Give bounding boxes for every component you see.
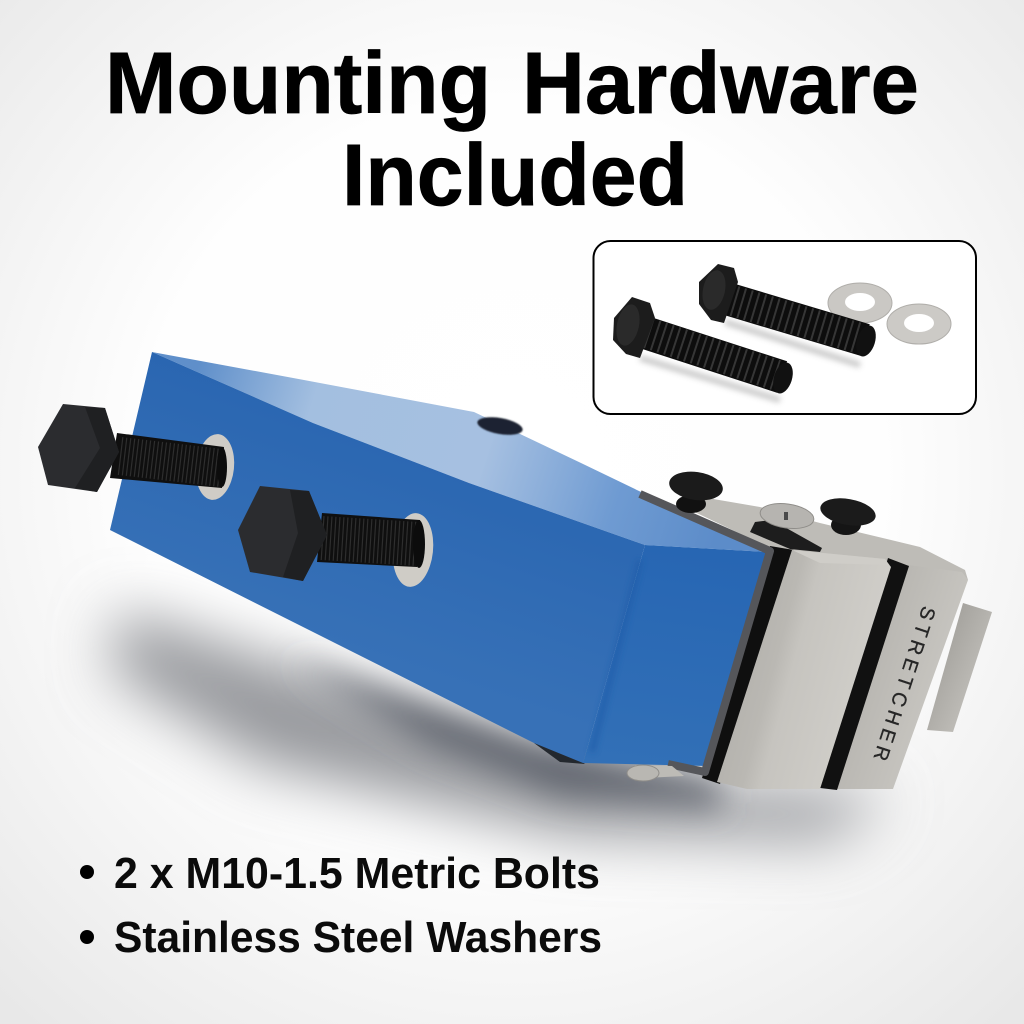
silver screw head	[759, 500, 815, 532]
housing top face	[152, 352, 768, 552]
housing front face	[110, 352, 645, 763]
stretcher bracket: rear steel section	[837, 565, 968, 789]
title	[105, 35, 919, 224]
inset bolt shadows	[640, 322, 860, 400]
black clip block	[750, 520, 822, 552]
black screw left	[667, 468, 725, 513]
inset panel: bolts and washers	[594, 241, 976, 414]
hex head	[38, 404, 119, 492]
bullet list	[80, 849, 602, 962]
title: Mounting	[105, 35, 491, 132]
washer	[389, 511, 437, 589]
bottom silver screw	[627, 765, 684, 781]
hex head	[238, 486, 327, 581]
inset bolt rear	[699, 264, 879, 359]
underside screw	[534, 743, 585, 764]
bullet: washers: Stainless Steel Washers	[114, 913, 602, 962]
stretcher bracket: grey plate	[640, 494, 770, 772]
inset washers	[828, 283, 951, 344]
black screw right	[818, 494, 878, 535]
washer	[193, 432, 237, 502]
steel top bevel	[792, 550, 889, 565]
title: Included	[342, 127, 688, 224]
stretcher bracket: rear tab	[927, 603, 992, 732]
inset bolt front	[613, 297, 796, 396]
bullet: bolts: 2 x M10-1.5 Metric Bolts	[114, 849, 600, 898]
threaded shaft	[110, 433, 224, 488]
stretcher bracket: front steel section	[717, 550, 891, 789]
drop shadow	[110, 610, 890, 840]
threaded shaft	[317, 513, 420, 567]
bend shading	[592, 560, 640, 752]
stretcher bracket: top surface	[680, 495, 968, 580]
stretcher bracket: black gasket front	[702, 546, 794, 784]
blue housing	[110, 352, 768, 766]
top mounting hole	[476, 414, 524, 438]
title: Hardware	[522, 35, 919, 132]
stretcher bracket: black gasket rear	[820, 558, 909, 790]
large bolt 2	[238, 486, 437, 589]
brand label: STRETCHER	[868, 603, 939, 763]
housing end face	[583, 545, 768, 766]
large bolt 1	[38, 404, 237, 502]
